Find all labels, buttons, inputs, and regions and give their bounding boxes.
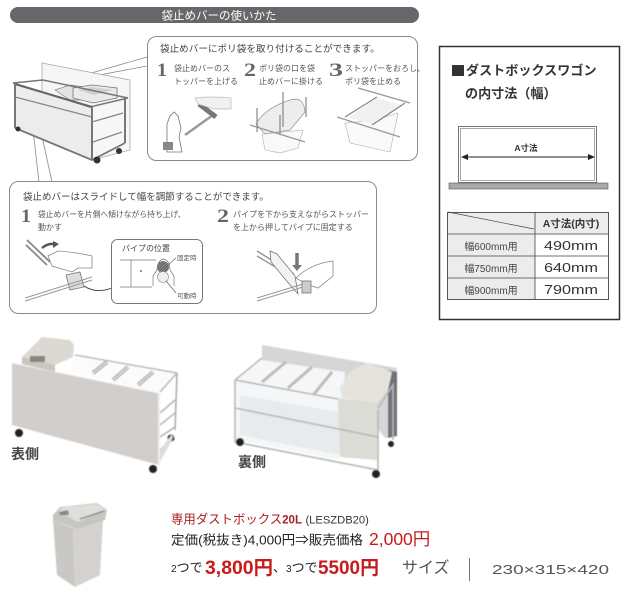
panel heading: attach poly bag: 袋止めバーにポリ袋を取り付けることができます。 [160,43,380,55]
step 3: fasten bag: 3 [329,60,343,81]
bulk price line: 3,800円 [205,558,273,579]
table: inner width by model: 幅900mm用 [464,284,518,297]
step 2: hang bag: 2 [244,60,256,81]
step 1: lift stopper: 袋止めバーのス [174,63,230,73]
product name: 専用ダストボックス20L (LESZDB20) [171,512,369,526]
step 2: hang bag: ポリ袋の口を袋 [259,63,315,73]
photo: wagon back [235,345,397,478]
label: front side: 表側 [11,446,39,462]
table: inner width by model: 640mm [544,260,598,275]
step 3: fasten bag [329,60,425,152]
title bar: 袋止めバーの使いかた [162,8,276,22]
bulk price line: 2つで [171,560,203,575]
panel: attach poly bag [148,36,418,160]
size spec [402,558,609,581]
slide step 2 [217,206,369,301]
table: inner width by model: A寸法(内寸) [543,217,599,230]
step 3: fasten bag: ストッパーをおろし、 [345,64,425,73]
photo: wagon front [12,337,177,473]
table: inner width by model: 幅750mm用 [464,262,518,275]
bulk price line: 、3つで [273,560,318,575]
step 2: hang bag: 止めバーに掛ける [259,76,323,86]
bulk price line: 5500円 [318,558,379,579]
slide step 1: 1 [21,206,31,227]
diagram: A dimension [449,126,608,189]
inset: pipe position: パイプの位置 [122,243,170,253]
leader lines: panel callouts [29,57,147,182]
photo: dust box [53,503,107,587]
slide step 2: 2 [217,206,229,227]
table: inner width by model: 790mm [544,282,598,297]
inset: pipe position [112,240,202,304]
step 3: fasten bag: ポリ袋を止める [345,76,401,86]
illustration: wagon line drawing [13,63,130,164]
label: back side: 裏側 [238,454,266,470]
heading: inner dimensions: ダストボックスワゴン [466,62,597,78]
slide step 2: を上から押してパイプに固定する [233,222,353,232]
diagram: A dimension: A寸法 [514,143,538,153]
slide step 1: 動かす [38,223,62,232]
step 2: hang bag [244,60,323,153]
panel: slide bar to adjust [10,182,376,314]
price line: 定価(税抜き)4,000円⇒販売価格 [171,532,363,548]
inset: pipe position: 固定時 [177,254,197,262]
slide step 1 [21,206,186,301]
size spec: サイズ [402,559,450,577]
price line [171,529,430,549]
price line: 2,000円 [369,529,430,549]
step 1: lift stopper [157,60,238,152]
slide step 2: パイプを下から支えながらストッパー [233,209,369,219]
bulk price line [171,558,379,579]
title bar [10,7,419,23]
panel: inner dimensions [440,46,620,320]
size spec: 230×315×420 [492,562,609,577]
heading line 2: の内寸法（幅） [465,85,557,101]
table: inner width by model: 490mm [544,238,598,253]
inset: pipe position: 可動時 [177,291,197,300]
step 1: lift stopper: 1 [157,60,167,81]
step 1: lift stopper: トッパーを上げる [174,77,238,86]
panel heading: slide bar: 袋止めバーはスライドして幅を調節することができます。 [23,191,269,203]
table: inner width by model [447,212,608,300]
slide step 1: 袋止めバーを片側へ傾けながら持ち上げ、 [38,209,186,219]
table: inner width by model: 幅600mm用 [464,240,518,253]
